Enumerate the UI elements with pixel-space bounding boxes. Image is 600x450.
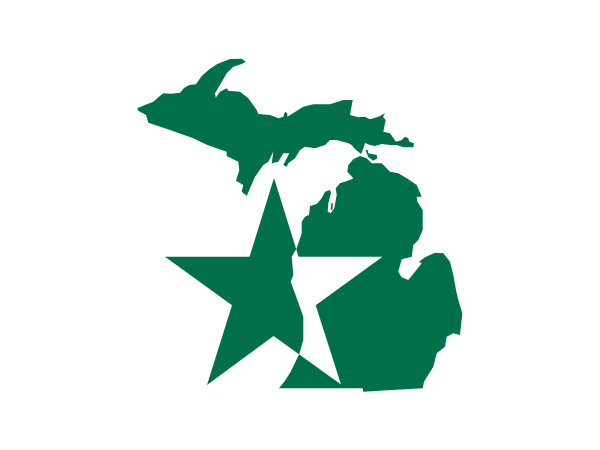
island in the straits <box>366 150 377 161</box>
upper peninsula <box>137 59 414 196</box>
lower peninsula combined with inverted star <box>165 156 462 392</box>
